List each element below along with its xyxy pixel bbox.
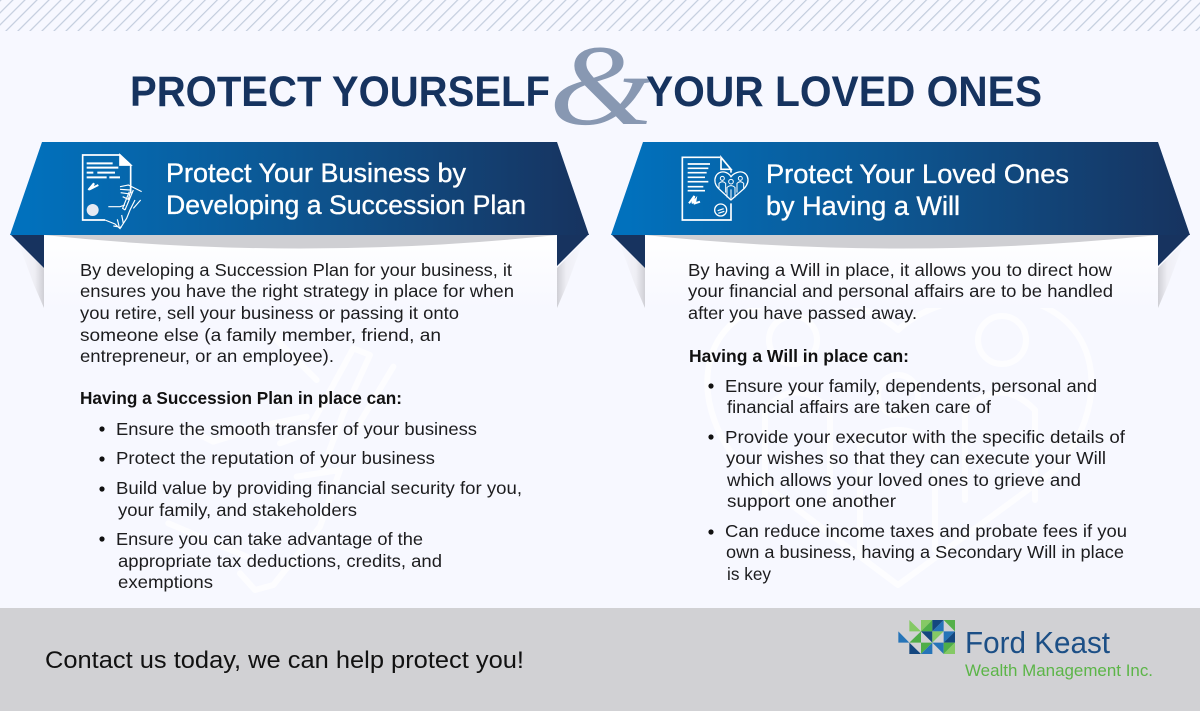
bullet list: own a business, having a Secondary Will in place <box>726 542 1124 562</box>
bullet list: financial affairs are taken care of <box>727 397 991 417</box>
banner shadow <box>44 235 557 248</box>
intro text: your financial and personal affairs are to be handled <box>688 281 1113 301</box>
bullet list <box>708 376 1127 584</box>
intro text: ensures you have the right strategy in place for when <box>80 281 514 301</box>
bullet list: support one another <box>727 491 896 511</box>
banner shadow <box>645 235 1158 248</box>
intro text <box>80 260 514 366</box>
bullet list <box>99 419 522 592</box>
title: YOUR LOVED ONES <box>646 68 1042 116</box>
title: & <box>549 22 655 149</box>
watermark: family heart <box>707 297 1091 585</box>
bullet list: Can reduce income taxes and probate fees if you <box>725 521 1127 541</box>
bullet list: Ensure the smooth transfer of your business <box>116 419 477 439</box>
intro text: entrepreneur, or an employee). <box>80 346 334 366</box>
panel top <box>44 235 557 308</box>
banner fold: left <box>611 234 645 268</box>
panel top <box>645 235 1158 308</box>
panel: will <box>611 142 1190 584</box>
subheading: Having a Succession Plan in place can: <box>80 388 402 408</box>
bullet list: Provide your executor with the specific details of <box>725 427 1125 447</box>
banner heading: by Having a Will <box>766 191 960 221</box>
icon: will with family heart <box>682 157 748 220</box>
bullet list: exemptions <box>118 572 213 592</box>
bullet list: appropriate tax deductions, credits, and <box>118 551 442 571</box>
bullet list: is key <box>727 564 771 584</box>
footer band <box>0 608 1200 711</box>
banner heading <box>766 159 1069 221</box>
bullet list: Ensure your family, dependents, personal and <box>725 376 1097 396</box>
bullet list: Protect the reputation of your business <box>116 448 435 468</box>
bullet list: Ensure you can take advantage of the <box>116 529 423 549</box>
intro text: after you have passed away. <box>688 303 917 323</box>
panel side shadows <box>619 242 1184 308</box>
banner heading <box>166 158 526 220</box>
striped top band <box>0 0 1200 31</box>
banner heading: Protect Your Business by <box>166 158 467 188</box>
panel: business succession <box>10 142 589 592</box>
banner fold: right <box>1158 234 1190 266</box>
bullet list: your family, and stakeholders <box>118 500 357 520</box>
bullet list: Build value by providing financial security for you, <box>116 478 522 498</box>
logo mosaic <box>898 620 955 654</box>
call to action: Contact us today, we can help protect you! <box>45 647 524 674</box>
title: PROTECT YOURSELF <box>130 68 550 116</box>
intro text <box>688 260 1113 323</box>
title <box>130 22 1042 149</box>
watermark: handshake <box>168 337 393 590</box>
intro text: you retire, sell your business or passing it onto <box>80 303 459 323</box>
logo: Ford Keast <box>898 620 1153 680</box>
intro text: By having a Will in place, it allows you to direct how <box>688 260 1112 280</box>
intro text: By developing a Succession Plan for your business, it <box>80 260 512 280</box>
subheading: Having a Will in place can: <box>689 346 909 366</box>
logo tagline: Wealth Management Inc. <box>965 661 1153 680</box>
banner fold: right <box>557 234 589 266</box>
banner heading: Developing a Succession Plan <box>166 190 526 220</box>
banner fold: left <box>10 234 44 268</box>
icon: contract with handshake <box>83 155 142 229</box>
banner heading: Protect Your Loved Ones <box>766 159 1069 189</box>
banner ribbon <box>611 142 1190 235</box>
banner ribbon <box>10 142 589 235</box>
intro text: someone else (a family member, friend, an <box>80 325 441 345</box>
panel side shadows <box>18 242 583 308</box>
bullet list: which allows your loved ones to grieve and <box>726 470 1081 490</box>
bullet list: your wishes so that they can execute your Will <box>726 448 1106 468</box>
logo wordmark: Ford Keast <box>965 625 1110 660</box>
